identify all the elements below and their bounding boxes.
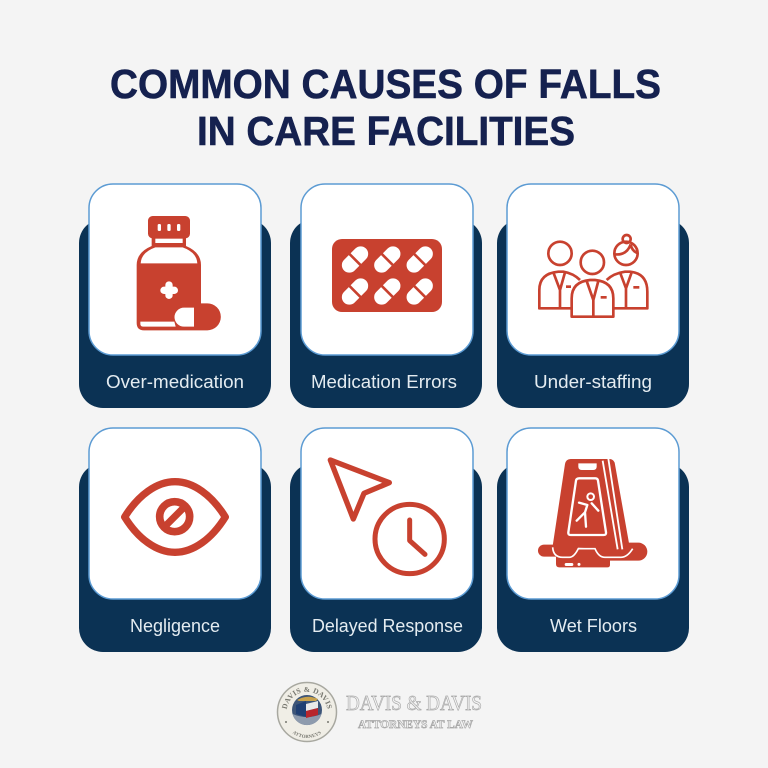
icon: blister pack	[332, 239, 442, 312]
icon: wet floor sign	[538, 459, 647, 567]
panel: wet floors	[497, 428, 689, 652]
icon: medicine bottle and capsule	[137, 216, 221, 330]
title: COMMON CAUSES OF FALLS	[110, 61, 661, 107]
label: under-staffing: Under-staffing	[534, 372, 652, 392]
label: medication errors: Medication Errors	[311, 372, 457, 392]
logo seal: DAVIS & DAVIS	[282, 687, 332, 710]
panel: negligence	[79, 428, 271, 652]
icon: cursor arrow and clock	[330, 460, 444, 574]
logo wordmark	[346, 691, 482, 731]
title: IN CARE FACILITIES	[197, 108, 575, 154]
label: negligence: Negligence	[130, 616, 220, 636]
icon: care staff group	[539, 235, 647, 317]
logo wordmark: ATTORNEYS AT LAW	[358, 717, 473, 731]
title	[110, 61, 661, 154]
panel: medication errors	[290, 184, 482, 408]
logo seal	[276, 682, 338, 742]
logo wordmark: DAVIS & DAVIS	[346, 691, 482, 715]
panel: delayed response	[290, 428, 482, 652]
icon: eye with prohibition sign	[125, 482, 225, 552]
label: over-medication: Over-medication	[106, 372, 244, 392]
logo seal: ATTORNEYS	[292, 731, 321, 738]
logo: Davis & Davis Attorneys at Law	[276, 682, 482, 742]
label: delayed response: Delayed Response	[312, 616, 463, 636]
label: wet floors: Wet Floors	[550, 616, 637, 636]
panel: over-medication	[79, 184, 271, 408]
panel: under-staffing	[497, 184, 689, 408]
